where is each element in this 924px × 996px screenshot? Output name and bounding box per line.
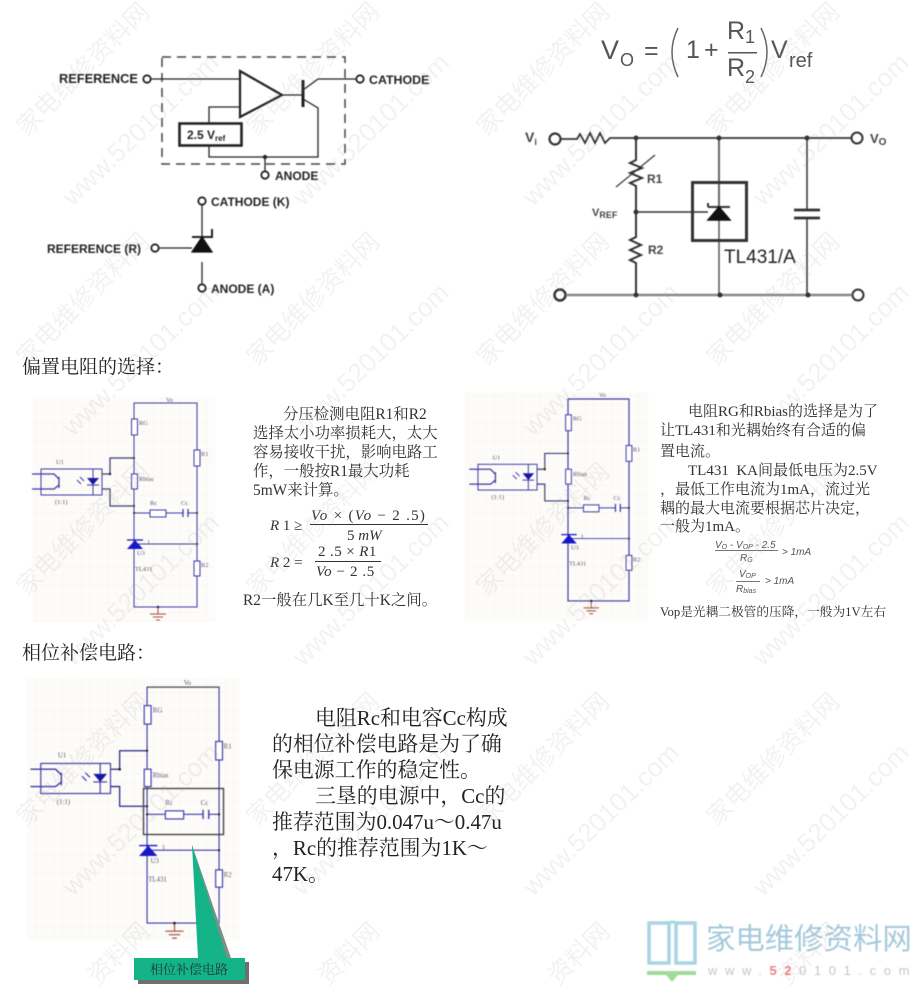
text block: phase compensation description: ，Rc的推荐范围为1K～ xyxy=(272,836,488,861)
formula: R1 and R2: Vo − 2 .5 xyxy=(316,564,375,580)
TL431 schematic symbol: REFERENCE (R) xyxy=(47,242,141,256)
panel: phase compensation schematic: Rbias xyxy=(153,772,169,779)
heading: phase compensation circuit: 相位补偿电路： xyxy=(22,638,155,665)
shunt regulator application circuit: V xyxy=(525,129,534,145)
watermark pattern: 家电维修资料网 xyxy=(11,458,155,601)
text block: phase compensation description: 电阻Rc和电容Cc构成 xyxy=(315,706,508,730)
panel: bias resistor schematic: (1:1) xyxy=(492,494,504,501)
watermark pattern: 家电维修资料网 xyxy=(471,458,615,601)
watermark pattern: www.520101.com xyxy=(746,277,915,442)
logo: book icon and site name: www.520101.com xyxy=(707,963,917,978)
output voltage formula: O xyxy=(620,50,634,70)
formula: R1 and R2: 2 .5 × R1 xyxy=(318,544,377,560)
formula: bias current: R xyxy=(736,584,743,595)
text block: RG and Rbias selection xyxy=(660,402,878,535)
watermark pattern: 家电维修资料网 xyxy=(11,688,155,831)
panel: phase compensation schematic: U3 xyxy=(150,858,159,865)
panel: phase compensation schematic: Vo xyxy=(184,680,192,687)
watermark pattern: 资料网 xyxy=(542,917,615,990)
panel: bias resistor schematic: Rbias xyxy=(573,471,588,478)
shunt regulator application circuit: O xyxy=(879,137,887,148)
text block: RG and Rbias selection: TL431 KA间最低电压为2.5V xyxy=(688,461,878,479)
watermark pattern: 家电维修资料网 xyxy=(701,688,845,831)
panel: bias resistor schematic: 1 xyxy=(581,534,584,541)
panel: voltage divider schematic xyxy=(32,397,215,622)
panel: phase compensation schematic: 1 xyxy=(162,845,166,852)
formula: R1 and R2 xyxy=(269,508,428,580)
panel: bias resistor schematic xyxy=(465,392,648,620)
text block: phase compensation description xyxy=(272,706,508,886)
panel: voltage divider schematic: TL431 xyxy=(135,566,152,573)
shunt regulator application circuit: REF xyxy=(599,210,618,220)
watermark pattern: 家电维修资料网 xyxy=(701,0,845,141)
watermark pattern: www.520101.com xyxy=(56,47,225,212)
panel: voltage divider schematic: Rbias xyxy=(139,476,154,483)
formula: bias current: O xyxy=(722,544,728,551)
panel: voltage divider schematic: U1 xyxy=(56,459,64,466)
formula: bias current: V xyxy=(715,540,722,551)
output voltage formula: R xyxy=(727,54,745,82)
panel: bias resistor schematic: Cc xyxy=(614,495,621,502)
TL431 schematic symbol xyxy=(47,195,289,296)
formula: bias current: - 2.5 xyxy=(753,540,776,551)
output voltage formula: V xyxy=(601,35,619,65)
TL431 schematic symbol: CATHODE (K) xyxy=(211,195,289,209)
formula: bias current: bias xyxy=(743,588,757,595)
functional block diagram: TL431: 2.5 V xyxy=(187,128,215,142)
panel: voltage divider schematic: Vo xyxy=(166,397,173,404)
output voltage formula: + xyxy=(704,36,719,64)
panel: bias resistor schematic: U1 xyxy=(493,454,500,461)
panel: voltage divider schematic: Cc xyxy=(181,500,188,507)
text block: phase compensation description: 三垦的电源中，Cc的 xyxy=(315,784,505,809)
panel: phase compensation schematic: U1 xyxy=(58,753,67,760)
watermark pattern: 家电维修资料网 xyxy=(701,228,845,371)
output voltage formula xyxy=(601,17,813,87)
text block: R1 and R2 selection: 作，一般按R1最大功耗 xyxy=(253,462,409,480)
panel: voltage divider schematic: R2 xyxy=(201,562,208,569)
output voltage formula: = xyxy=(644,37,659,65)
panel: voltage divider schematic: 1 xyxy=(147,539,150,546)
text block: R1 and R2 selection xyxy=(253,405,438,499)
formula: R1 and R2: Vo × (Vo − 2 .5) xyxy=(311,508,426,524)
watermark pattern: 家电维修资料网 xyxy=(11,0,155,141)
output voltage formula: 1 xyxy=(686,36,700,64)
watermark pattern: 资料网 xyxy=(312,917,385,990)
callout: phase compensation circuit xyxy=(134,845,249,984)
text block: Vop note: Vop是光耦二极管的压降，一般为1V左右 xyxy=(660,604,886,620)
text block: RG and Rbias selection: 电阻RG和Rbias的选择是为了 xyxy=(688,402,878,420)
panel: phase compensation schematic xyxy=(27,678,240,940)
TL431 schematic symbol: ANODE (A) xyxy=(211,282,274,296)
text block: RG and Rbias selection: 置电流。 xyxy=(660,442,720,460)
panel: phase compensation schematic: Cc xyxy=(201,800,208,807)
panel: bias resistor schematic: TL431 xyxy=(569,560,586,567)
panel: voltage divider schematic: RG xyxy=(139,420,148,427)
watermark pattern: 资料网 xyxy=(82,917,155,990)
watermark pattern: 家电维修资料网 xyxy=(471,228,615,371)
watermark pattern: 家电维修资料网 xyxy=(241,688,385,831)
watermark pattern: www.520101.com xyxy=(286,47,455,212)
watermark pattern: 家电维修资料网 xyxy=(701,458,845,601)
watermark pattern: www.520101.com xyxy=(286,737,455,902)
watermark pattern: www.520101.com xyxy=(56,277,225,442)
formula: bias current: OP xyxy=(743,544,753,551)
panel: voltage divider schematic: R1 xyxy=(201,451,208,458)
watermark pattern: 家电维修资料网 xyxy=(241,458,385,601)
formula: bias current: - V xyxy=(727,540,744,551)
formula: R1 and R2: 5 mW xyxy=(347,528,383,544)
formula: bias current: > 1mA xyxy=(765,576,795,587)
watermark pattern: 家电维修资料网 xyxy=(471,688,615,831)
functional block diagram: TL431: ANODE xyxy=(275,169,318,183)
panel: phase compensation schematic: TL431 xyxy=(148,876,167,883)
watermark pattern: 资料网 xyxy=(772,917,845,990)
watermark pattern: www.520101.com xyxy=(286,277,455,442)
output voltage formula: 2 xyxy=(745,67,755,87)
panel: bias resistor schematic: RG xyxy=(573,416,582,423)
watermark pattern: 家电维修资料网 xyxy=(11,228,155,371)
text block: RG and Rbias selection: 耦的最大电流要根据芯片决定， xyxy=(660,499,870,517)
callout: phase compensation circuit: 相位补偿电路 xyxy=(150,962,228,977)
text block: phase compensation description: 的相位补偿电路是为了确 xyxy=(272,732,502,756)
panel: phase compensation schematic: R2 xyxy=(224,872,232,879)
panel: bias resistor schematic: Vo xyxy=(599,392,606,399)
shunt regulator application circuit xyxy=(525,129,887,300)
output voltage formula: V xyxy=(771,36,788,64)
text block: phase compensation description: 保电源工作的稳定性。 xyxy=(272,758,481,782)
panel: phase compensation schematic: RG xyxy=(153,707,162,715)
output voltage formula: 1 xyxy=(745,27,755,47)
panel: phase compensation schematic: Rc xyxy=(165,800,173,807)
shunt regulator application circuit: i xyxy=(534,137,537,147)
text block: R1 and R2 selection: 5mW来计算。 xyxy=(253,481,349,499)
watermark pattern: www.520101.com xyxy=(516,507,685,672)
formula: bias current: > 1mA xyxy=(782,547,812,558)
watermark pattern: www.520101.com xyxy=(56,737,225,902)
watermark pattern: www.520101.com xyxy=(746,737,915,902)
formula: bias current: V xyxy=(739,569,746,580)
shunt regulator application circuit: TL431/A xyxy=(724,247,796,268)
shunt regulator application circuit: R2 xyxy=(648,243,664,257)
formula: bias current: G xyxy=(747,557,753,564)
watermark pattern: www.520101.com xyxy=(746,47,915,212)
text block: R1 and R2 selection: 分压检测电阻R1和R2 xyxy=(283,405,427,423)
text block: RG and Rbias selection: ，最低工作电流为1mA，流过光 xyxy=(660,480,870,498)
text block: R2 range: R2一般在几K至几十K之间。 xyxy=(243,591,437,609)
heading: bias resistor selection: 偏置电阻的选择： xyxy=(22,352,174,379)
panel: voltage divider schematic: U3 xyxy=(137,550,145,557)
text block: R1 and R2 selection: 容易接收干扰，影响电路工 xyxy=(253,443,438,461)
logo: book icon and site name: 家电维修资料网 xyxy=(706,923,912,956)
formula: bias current xyxy=(715,540,812,595)
functional block diagram: TL431: CATHODE xyxy=(369,73,429,87)
watermark pattern: www.520101.com xyxy=(746,507,915,672)
watermark pattern: www.520101.com xyxy=(516,277,685,442)
shunt regulator application circuit: V xyxy=(870,131,879,146)
watermark pattern: 家电维修资料网 xyxy=(241,0,385,141)
watermark pattern: 家电维修资料网 xyxy=(241,228,385,371)
text block: RG and Rbias selection: 让TL431和光耦始终有合适的偏 xyxy=(660,421,866,439)
panel: phase compensation schematic: R1 xyxy=(224,743,232,750)
watermark pattern: www.520101.com xyxy=(286,507,455,672)
watermark pattern: www.520101.com xyxy=(516,47,685,212)
panel: voltage divider schematic: (1:1) xyxy=(55,499,67,506)
panel: bias resistor schematic: Rc xyxy=(583,495,591,502)
text block: phase compensation description: 47K。 xyxy=(272,862,329,886)
functional block diagram: TL431: ref xyxy=(215,134,226,143)
formula: bias current: OP xyxy=(746,573,756,580)
formula: bias current: R xyxy=(740,553,747,564)
watermark pattern: www.520101.com xyxy=(56,507,225,672)
panel: bias resistor schematic: U3 xyxy=(571,544,579,551)
panel: voltage divider schematic: Rc xyxy=(150,500,157,507)
functional block diagram: TL431 xyxy=(59,57,429,183)
panel: phase compensation schematic: (1:1) xyxy=(57,799,70,806)
watermark pattern: www.520101.com xyxy=(516,737,685,902)
logo: book icon and site name xyxy=(647,922,917,982)
formula: R1 and R2: R 2 = xyxy=(269,555,303,571)
shunt regulator application circuit: R1 xyxy=(647,172,663,186)
text block: phase compensation description: 推荐范围为0.047u～0.47u xyxy=(272,810,502,834)
panel: bias resistor schematic: R2 xyxy=(633,556,640,563)
shunt regulator application circuit: V xyxy=(592,207,599,219)
panel: bias resistor schematic: R1 xyxy=(633,446,640,453)
output voltage formula: ref xyxy=(789,50,813,72)
text block: RG and Rbias selection: 一般为1mA。 xyxy=(660,518,750,535)
functional block diagram: TL431: REFERENCE xyxy=(59,71,138,86)
output voltage formula: R xyxy=(727,17,745,45)
formula: R1 and R2: R 1 ≥ xyxy=(269,518,302,534)
text block: R1 and R2 selection: 选择太小功率损耗大，太大 xyxy=(253,424,438,442)
watermark pattern: 家电维修资料网 xyxy=(471,0,615,141)
